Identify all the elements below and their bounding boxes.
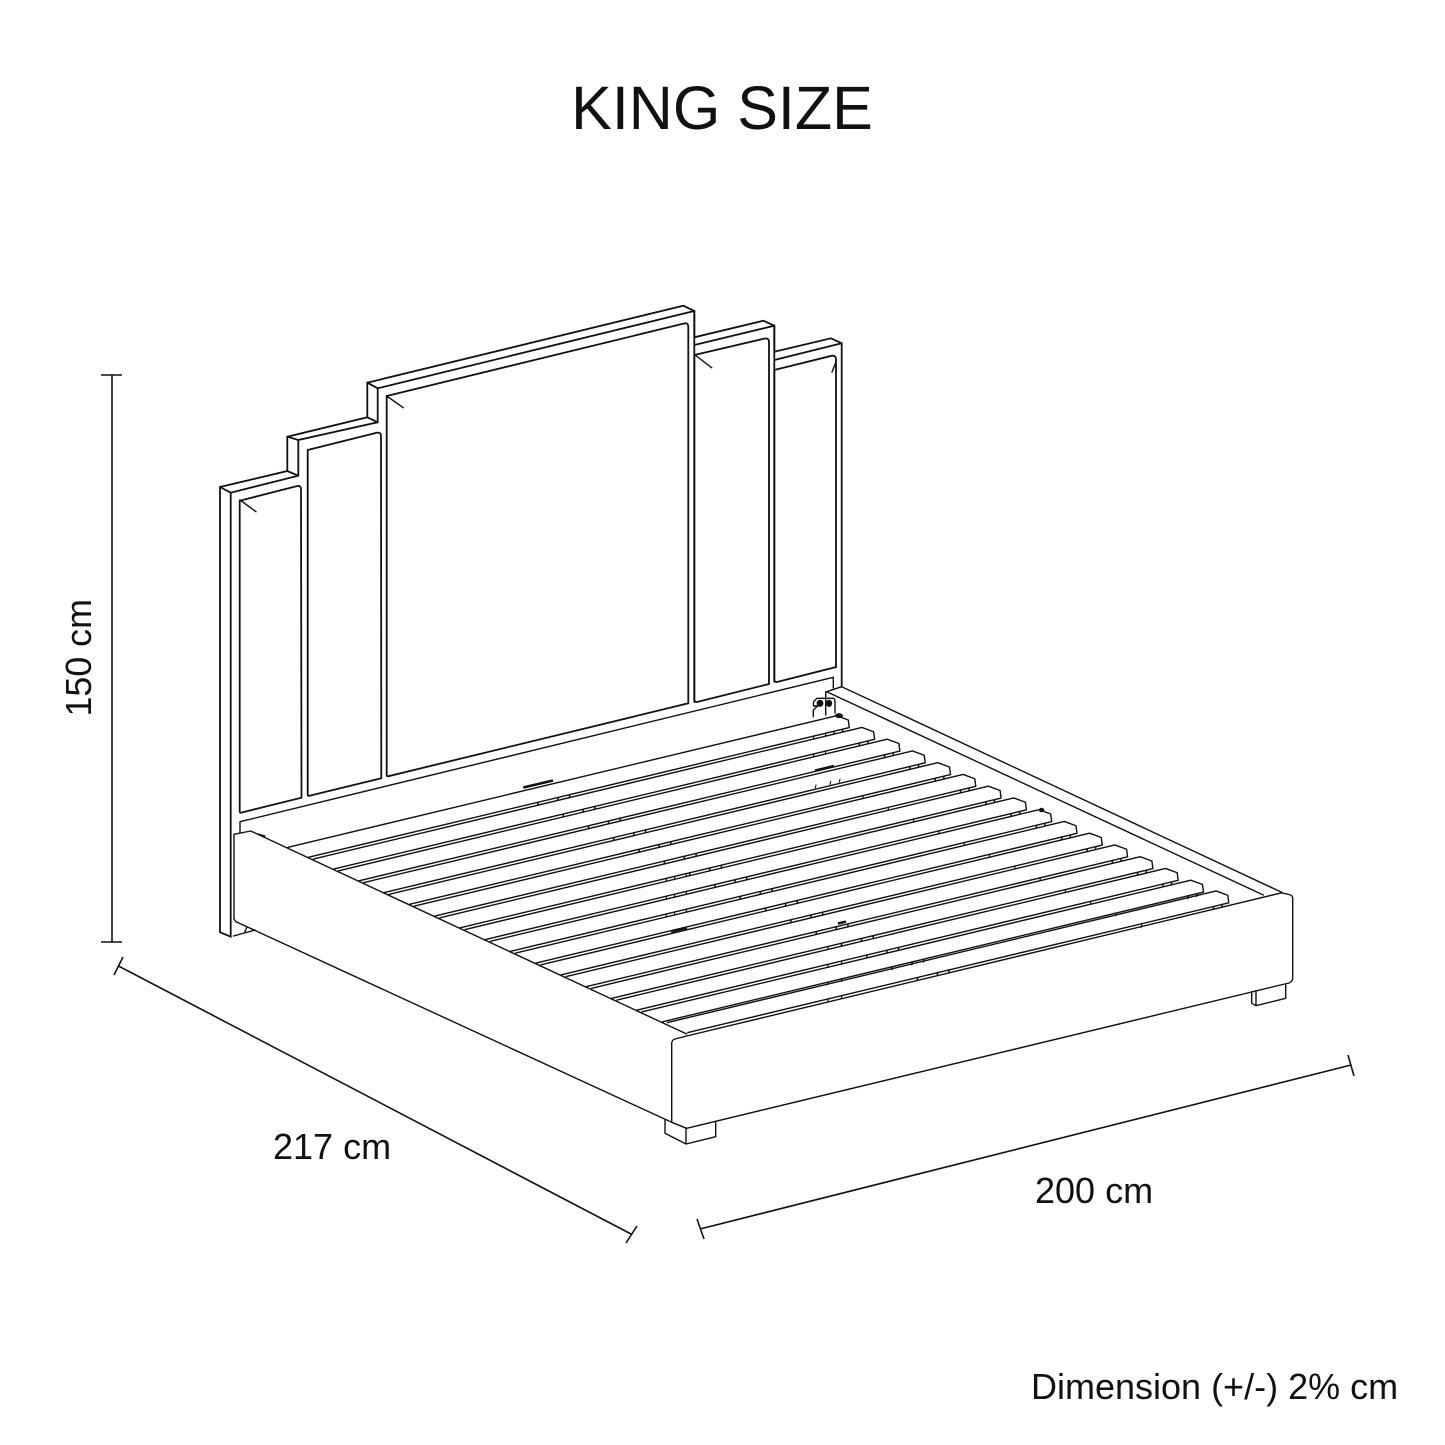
width label: 200 cm: [1035, 1170, 1153, 1211]
slat batten ticks: [666, 733, 1142, 1002]
headboard: [220, 306, 842, 937]
headboard panel 2: [308, 433, 381, 796]
headboard panel 1: [240, 486, 302, 813]
headboard stepped outline: [220, 306, 842, 937]
length label: 217 cm: [273, 1126, 391, 1167]
panel fold marks: [240, 355, 836, 512]
headboard lower rail: [240, 677, 833, 833]
hardware bracket: [813, 698, 843, 718]
height label: 150 cm: [59, 599, 99, 716]
height dimension line: [101, 375, 122, 942]
headboard panel 5: [774, 356, 836, 682]
title: KING SIZE: [571, 74, 873, 142]
rear leg: [1252, 984, 1286, 1006]
side rail: [234, 831, 687, 1122]
tolerance note: Dimension (+/-) 2% cm: [1031, 1366, 1398, 1407]
headboard centre panel: [387, 323, 688, 776]
bed line drawing: [220, 306, 1293, 1144]
small fixing dot: [1039, 808, 1044, 812]
foot end panel: [672, 893, 1293, 1128]
slats: [288, 716, 1229, 1033]
dark hardware marks on slats: [523, 766, 846, 932]
length dimension line: [114, 957, 637, 1243]
width dimension line: [697, 1055, 1354, 1239]
headboard panel 4: [694, 338, 769, 702]
far side rail: [826, 687, 1282, 895]
front leg: [665, 1120, 716, 1144]
